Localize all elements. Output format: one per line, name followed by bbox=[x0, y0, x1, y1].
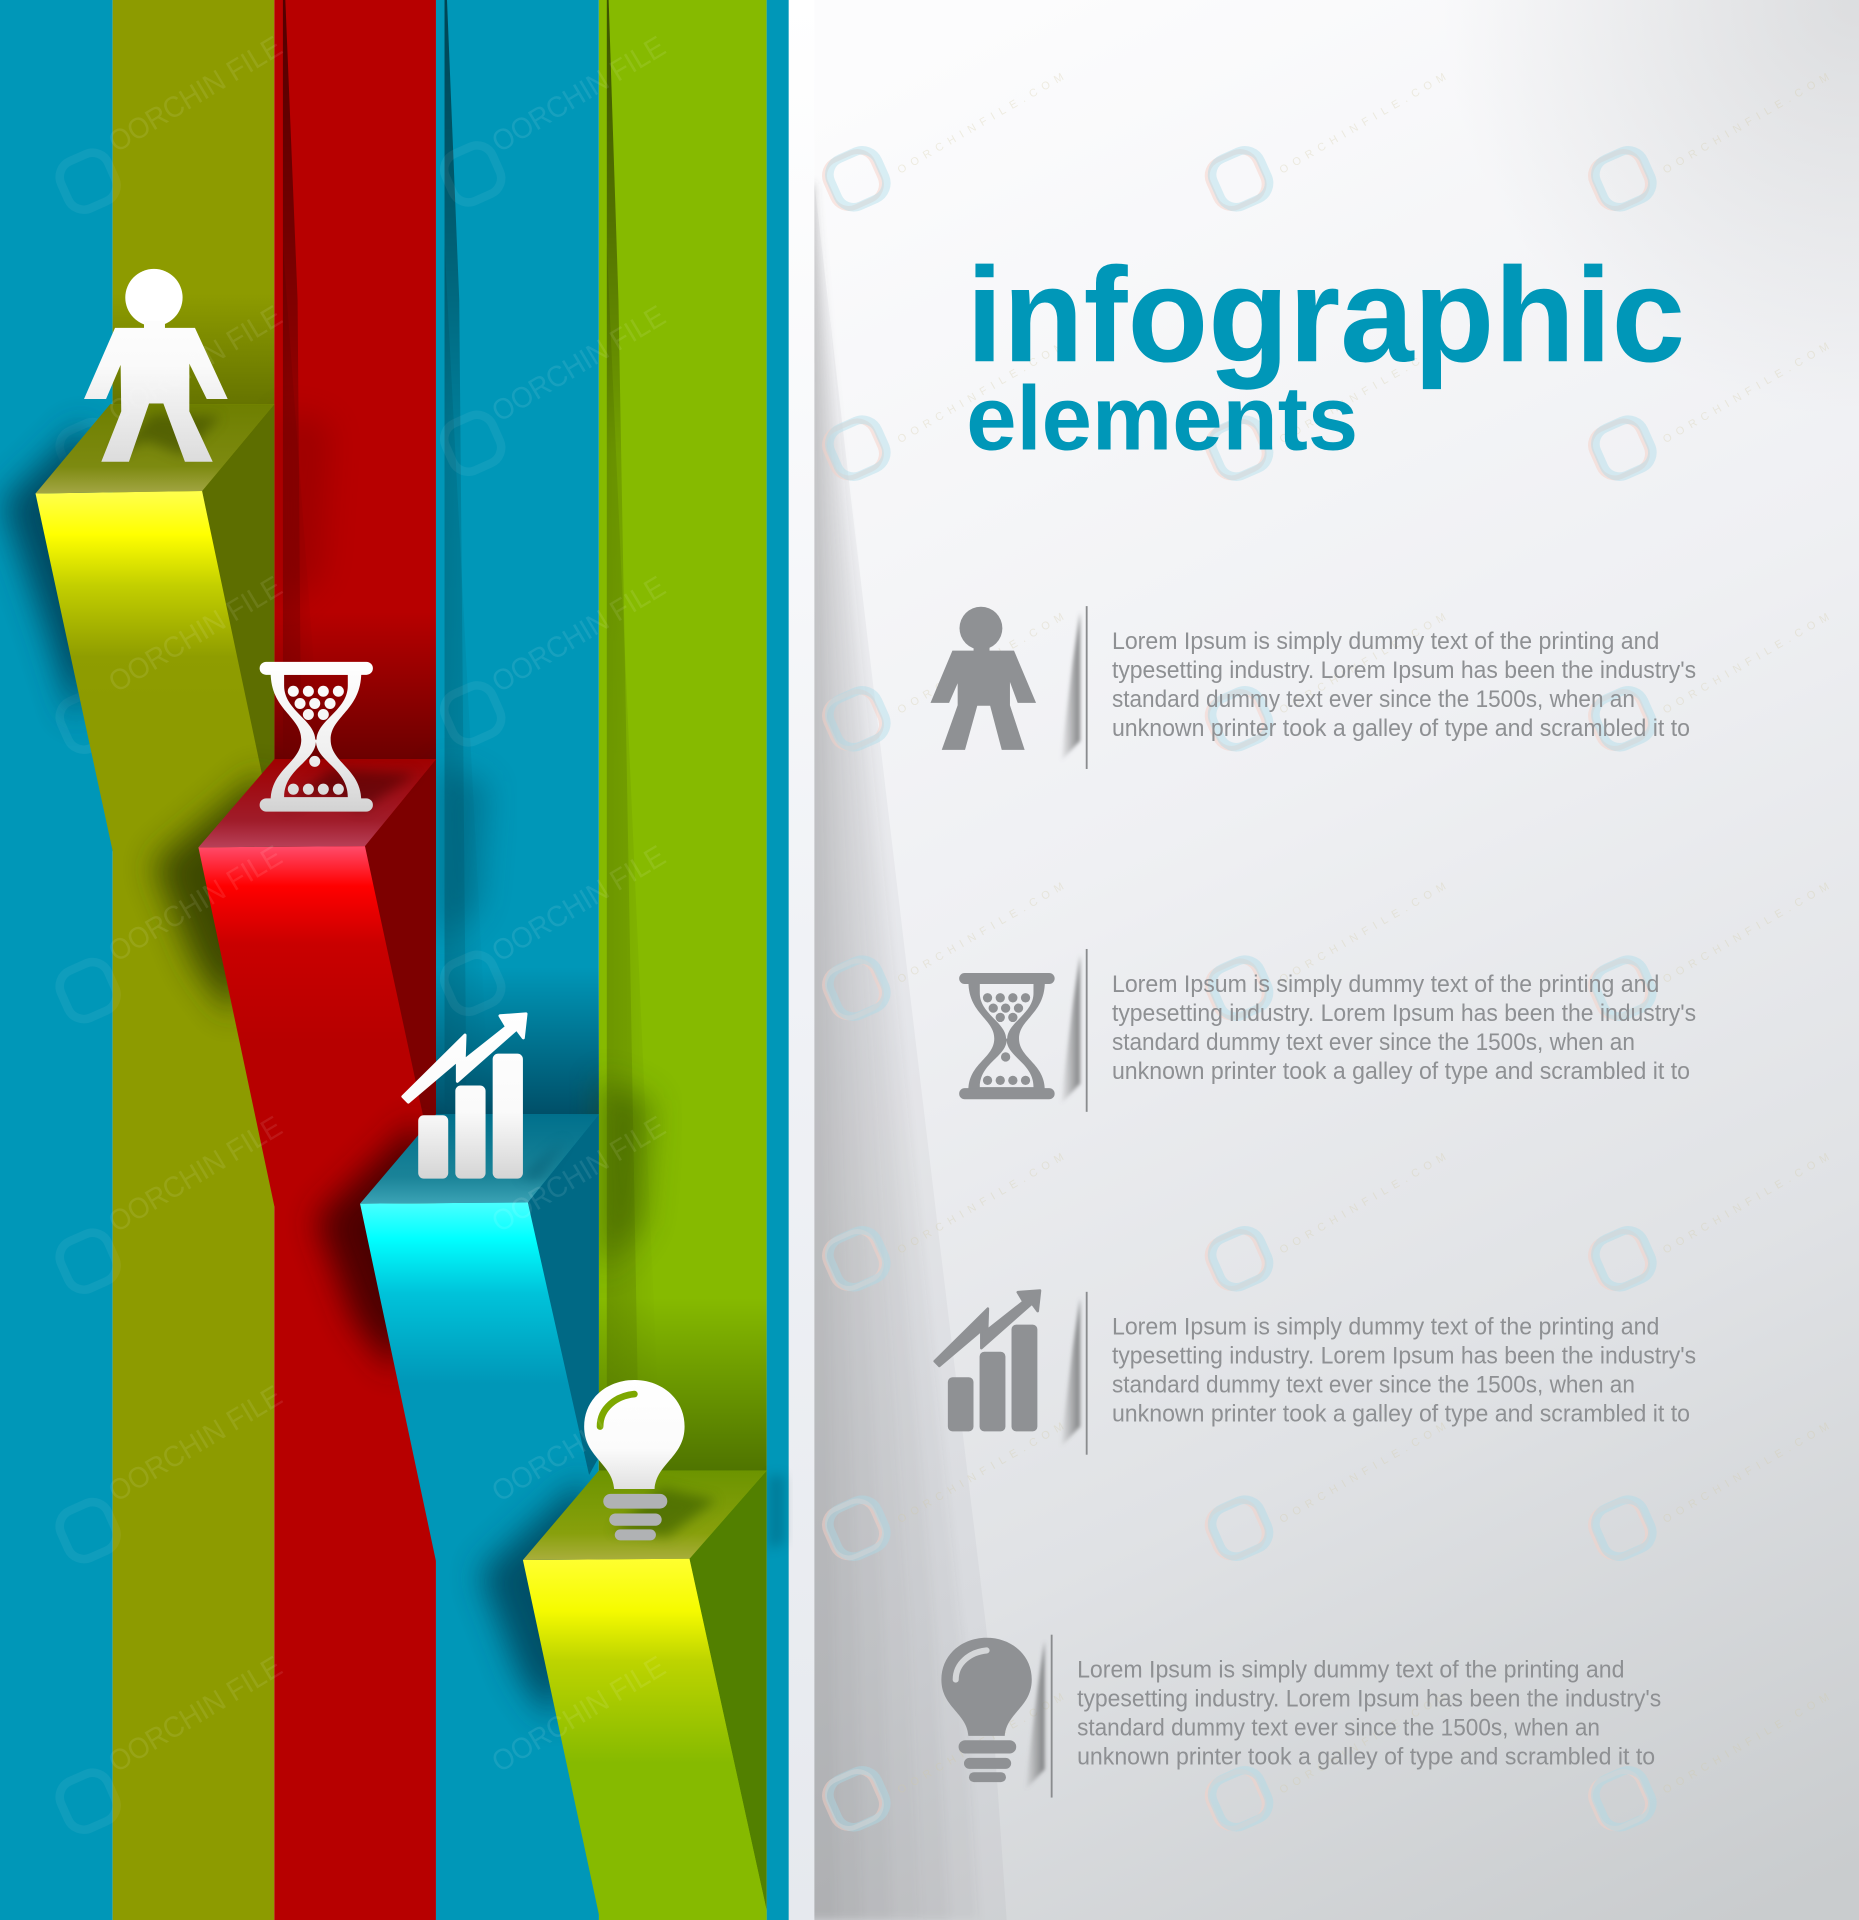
text block 2 bbox=[1112, 971, 1696, 1085]
watermark: right small diagonal text: OORCHINFILE.COM bbox=[1661, 1151, 1831, 1256]
text block 3: typesetting industry. Lorem Ipsum has been the industry's bbox=[1112, 1343, 1696, 1370]
text block 2: standard dummy text ever since the 1500s, when an bbox=[1112, 1029, 1635, 1056]
text block 4 bbox=[1077, 1657, 1661, 1770]
text block 3 bbox=[1112, 1314, 1696, 1428]
watermark: left diagonal text: OORCHIN FILE bbox=[486, 30, 671, 159]
text block 4: standard dummy text ever since the 1500s, when an bbox=[1077, 1715, 1600, 1742]
watermark: right small diagonal text: OORCHINFILE.COM bbox=[1278, 611, 1448, 716]
watermark: right small diagonal text: OORCHINFILE.COM bbox=[1278, 1421, 1448, 1526]
watermark: right small diagonal text: OORCHINFILE.COM bbox=[1278, 341, 1448, 446]
watermark: right small diagonal text: OORCHINFILE.COM bbox=[1661, 1421, 1831, 1526]
watermark: left diagonal text: OORCHIN FILE bbox=[103, 30, 288, 159]
watermark: left diagonal text: OORCHIN FILE bbox=[486, 839, 671, 968]
text block 4: Lorem Ipsum is simply dummy text of the printing and bbox=[1077, 1657, 1624, 1684]
text block 1: standard dummy text ever since the 1500s, when an bbox=[1112, 686, 1635, 713]
watermark: right small diagonal text: OORCHINFILE.COM bbox=[896, 341, 1066, 446]
watermark: left diagonal text: OORCHIN FILE bbox=[486, 1110, 671, 1239]
text block 3: standard dummy text ever since the 1500s, when an bbox=[1112, 1372, 1635, 1399]
text block 2: Lorem Ipsum is simply dummy text of the printing and bbox=[1112, 971, 1659, 998]
text block 4: typesetting industry. Lorem Ipsum has been the industry's bbox=[1077, 1686, 1661, 1713]
text block 3: unknown printer took a galley of type and scrambled it to bbox=[1112, 1401, 1690, 1428]
title: infographic elements bbox=[966, 239, 1685, 469]
watermark: left diagonal text: OORCHIN FILE bbox=[486, 570, 671, 699]
title: infographic elements: elements bbox=[966, 368, 1358, 469]
panel: coloured vertical bands bbox=[0, 0, 789, 1920]
icon: white person on olive step bbox=[84, 269, 228, 462]
ribbon 3: blue with cyan highlight bbox=[316, 1114, 599, 1920]
text block 1: unknown printer took a galley of type and scrambled it to bbox=[1112, 715, 1690, 742]
text block 1 bbox=[1112, 628, 1696, 742]
icon: white bar chart with rising arrow bbox=[403, 1014, 526, 1178]
watermark: right small diagonal text: OORCHINFILE.COM bbox=[1278, 71, 1448, 176]
ribbon 1: olive with yellow highlight bbox=[2, 404, 274, 1206]
watermark: right small diagonal text: OORCHINFILE.COM bbox=[1278, 1151, 1448, 1256]
icon: white hourglass on red step bbox=[260, 662, 373, 812]
watermark: left diagonal text: OORCHIN FILE bbox=[103, 1110, 288, 1239]
watermark: right small diagonal text: OORCHINFILE.COM bbox=[896, 1151, 1066, 1256]
row 2: hourglass and description bbox=[959, 949, 1696, 1112]
row 1: person and description bbox=[930, 606, 1696, 769]
watermark: left diagonal text: OORCHIN FILE bbox=[486, 1379, 671, 1508]
row 4: bulb and description bbox=[941, 1635, 1661, 1798]
watermark: left diagonal text: OORCHIN FILE bbox=[103, 299, 288, 428]
watermark: right small diagonal text: OORCHINFILE.COM bbox=[896, 611, 1066, 716]
watermark: right small diagonal text: OORCHINFILE.COM bbox=[1661, 341, 1831, 446]
watermark: right small diagonal text bbox=[896, 71, 1831, 1796]
text block 1: Lorem Ipsum is simply dummy text of the printing and bbox=[1112, 628, 1659, 655]
icon: gray light bulb bbox=[941, 1638, 1032, 1782]
text block 2: typesetting industry. Lorem Ipsum has been the industry's bbox=[1112, 1000, 1696, 1027]
icon: white light bulb on green step bbox=[584, 1380, 685, 1540]
watermark: left diagonal text: OORCHIN FILE bbox=[486, 1650, 671, 1779]
watermark: right small diagonal text: OORCHINFILE.COM bbox=[896, 71, 1066, 176]
title: infographic elements: infographic bbox=[966, 239, 1685, 390]
text block 4: unknown printer took a galley of type and scrambled it to bbox=[1077, 1743, 1655, 1770]
watermark: right small diagonal text: OORCHINFILE.COM bbox=[896, 1691, 1066, 1796]
text block 2: unknown printer took a galley of type and scrambled it to bbox=[1112, 1058, 1690, 1085]
icon: gray hourglass bbox=[959, 973, 1055, 1099]
row 3: chart and description bbox=[935, 1291, 1696, 1455]
background panel: right paper bbox=[789, 0, 1859, 1920]
text block 1: typesetting industry. Lorem Ipsum has been the industry's bbox=[1112, 657, 1696, 684]
watermark: left diagonal text: OORCHIN FILE bbox=[103, 1650, 288, 1779]
watermark: right small diagonal text: OORCHINFILE.COM bbox=[1278, 1691, 1448, 1796]
watermark: right small diagonal text: OORCHINFILE.COM bbox=[896, 881, 1066, 986]
watermark: left diagonal text: OORCHIN FILE bbox=[103, 1379, 288, 1508]
icon: gray person bbox=[930, 607, 1036, 750]
watermark: right small diagonal text: OORCHINFILE.COM bbox=[1661, 881, 1831, 986]
text block 3: Lorem Ipsum is simply dummy text of the printing and bbox=[1112, 1314, 1659, 1341]
watermark: left diagonal text: OORCHIN FILE bbox=[103, 570, 288, 699]
watermark: right small diagonal text: OORCHINFILE.COM bbox=[1661, 611, 1831, 716]
watermark: left diagonal text: OORCHIN FILE bbox=[103, 839, 288, 968]
watermark: right small diagonal text: OORCHINFILE.COM bbox=[1661, 71, 1831, 176]
icon: gray bar chart with arrow bbox=[935, 1291, 1040, 1431]
ribbon 2: red with bright highlight bbox=[153, 759, 436, 1561]
watermark: right small diagonal text: OORCHINFILE.COM bbox=[1661, 1691, 1831, 1796]
watermark: left diagonal text: OORCHIN FILE bbox=[486, 299, 671, 428]
ribbon 4: green with yellow highlight bbox=[480, 1471, 767, 1920]
watermark: right small diagonal text: OORCHINFILE.COM bbox=[1278, 881, 1448, 986]
watermark: right logos bbox=[819, 145, 1658, 1834]
watermark: left logos and text bbox=[54, 140, 507, 1835]
watermark: right small diagonal text: OORCHINFILE.COM bbox=[896, 1421, 1066, 1526]
watermark: left diagonal text bbox=[103, 30, 671, 1779]
